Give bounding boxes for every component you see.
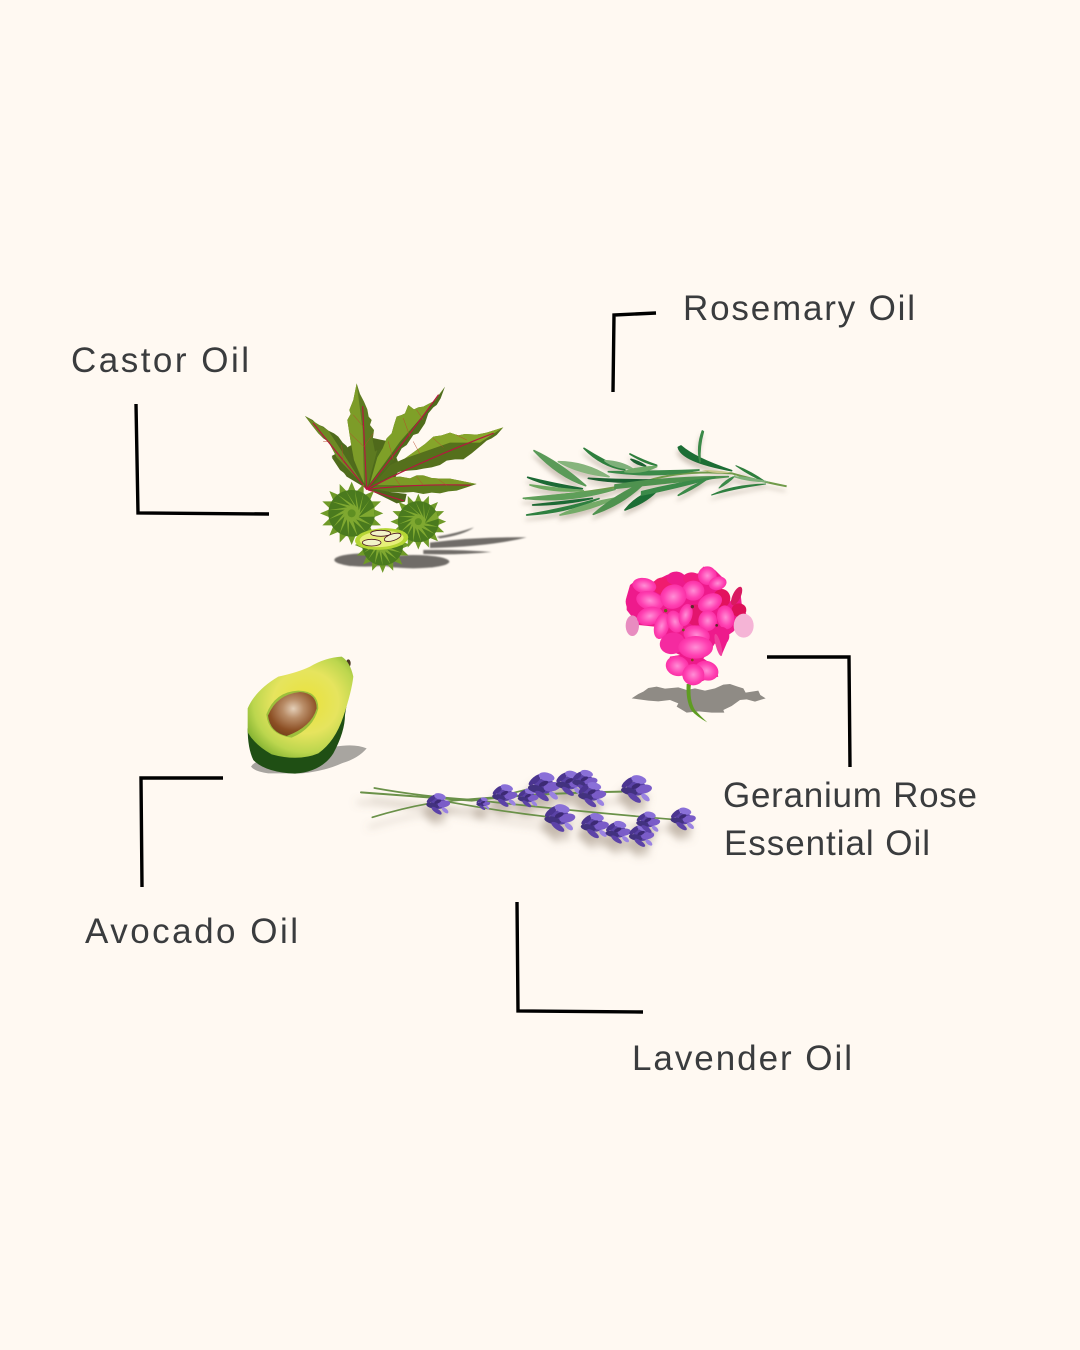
- avocado flesh: [248, 657, 353, 758]
- castor fruit, halved: [355, 528, 410, 573]
- icon: rosemary sprig: [523, 431, 787, 515]
- label: Geranium Rose Essential Oil: Essential Oil: [724, 824, 930, 863]
- avocado seed: [266, 691, 318, 738]
- arrow: lavender bracket: [517, 902, 643, 1012]
- geranium shadow: [632, 684, 766, 713]
- castor fruit, right: [390, 494, 446, 550]
- label: Geranium Rose Essential Oil: [723, 776, 977, 863]
- arrow: avocado bracket: [141, 778, 223, 887]
- avocado skin: [248, 695, 348, 774]
- lavender stems: [361, 788, 672, 819]
- label: Rosemary Oil: Rosemary Oil: [683, 289, 915, 328]
- arrow: rosemary bracket: [613, 313, 656, 392]
- infographic canvas: [72, 294, 976, 1070]
- geranium pale petals: [626, 614, 754, 638]
- icon: avocado half: [248, 657, 367, 774]
- label: Castor Oil: Castor Oil: [71, 341, 249, 380]
- arrow: castor bracket: [136, 404, 269, 514]
- geranium stem: [687, 684, 707, 722]
- geranium back petals: [626, 572, 746, 626]
- arrow: geranium bracket: [767, 657, 850, 767]
- label: Lavender Oil: Lavender Oil: [632, 1039, 852, 1078]
- icon: lavender sprigs: [361, 769, 696, 848]
- castor veins: [313, 395, 493, 501]
- castor leaves: [305, 383, 503, 503]
- avocado stem: [346, 659, 351, 667]
- geranium base silhouette: [627, 567, 747, 685]
- label: Avocado Oil: Avocado Oil: [85, 912, 298, 951]
- lavender flower heads: [426, 769, 696, 848]
- icon: geranium flower: [626, 566, 766, 722]
- label: Geranium Rose Essential Oil: Geranium Rose: [723, 776, 977, 815]
- geranium lower flowers: [657, 623, 721, 685]
- castor fruit, left: [320, 482, 383, 545]
- avocado shadow: [251, 745, 367, 773]
- geranium upper flowers: [631, 566, 736, 657]
- icon: castor plant: [305, 383, 527, 573]
- castor shadows: [334, 527, 527, 568]
- geranium flower centres: [664, 605, 718, 661]
